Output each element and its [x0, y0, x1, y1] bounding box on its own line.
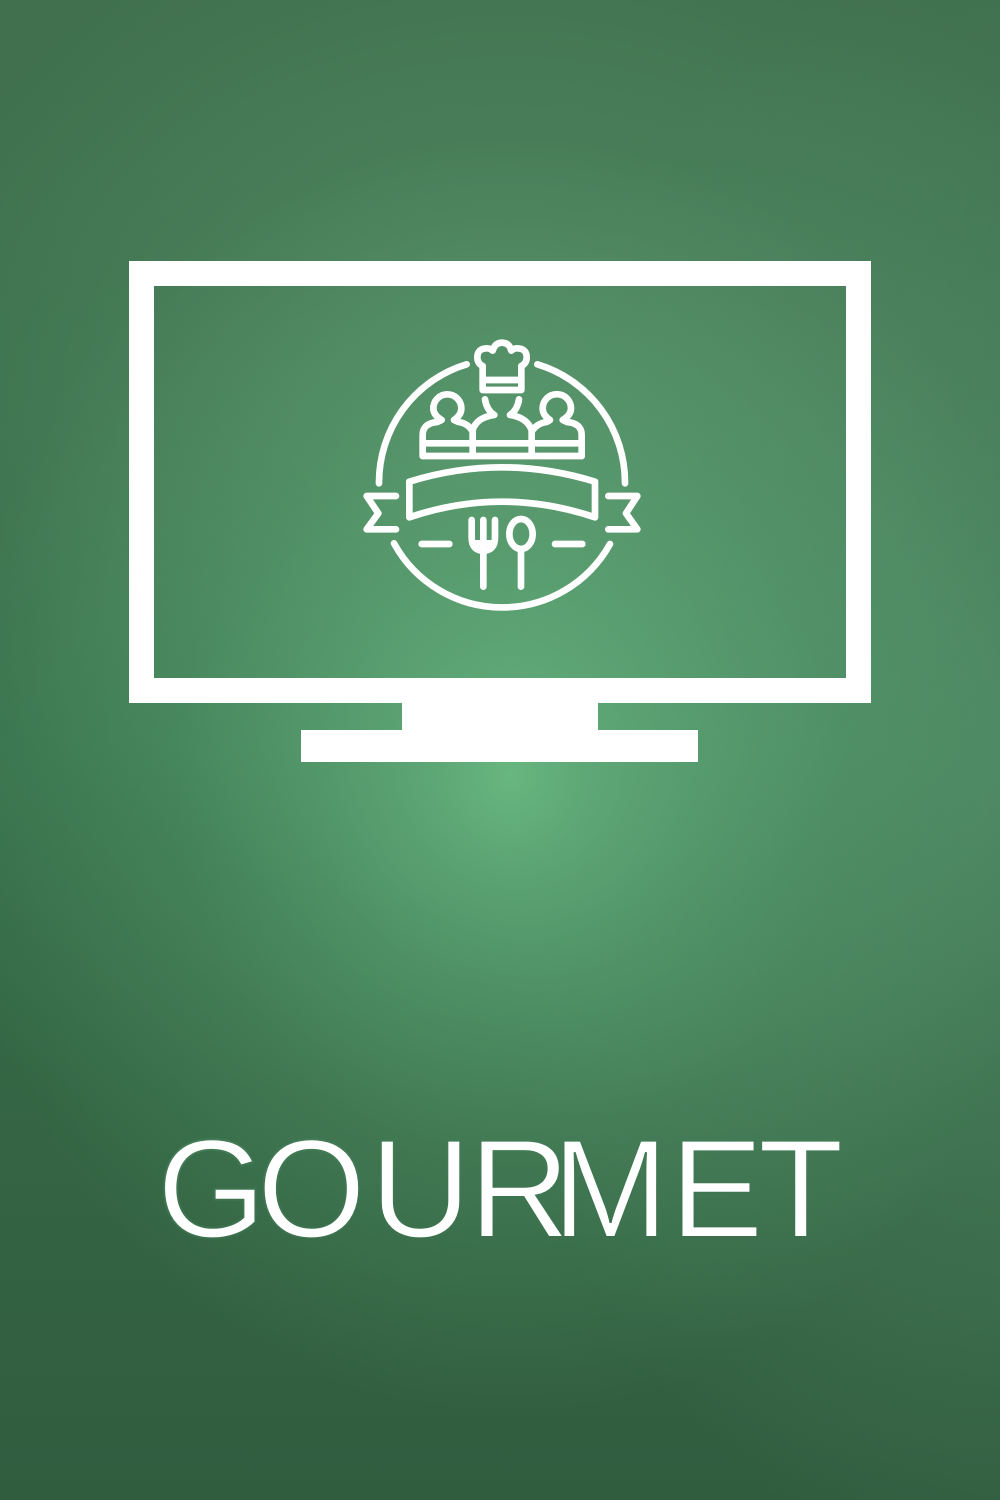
ribbon tail right: [608, 496, 637, 529]
banner: [409, 467, 595, 517]
icon: gourmet emblem: [367, 343, 637, 607]
icon: television monitor: [129, 261, 871, 762]
icon: three people: [423, 394, 582, 456]
dashes: [422, 534, 582, 554]
ribbon tail left: [367, 496, 396, 529]
title: GOURMET: [157, 1110, 844, 1267]
icon: spoon: [509, 519, 533, 587]
icon: fork: [472, 520, 495, 587]
emblem ring: [379, 364, 625, 607]
icon: chef hat: [477, 343, 527, 390]
